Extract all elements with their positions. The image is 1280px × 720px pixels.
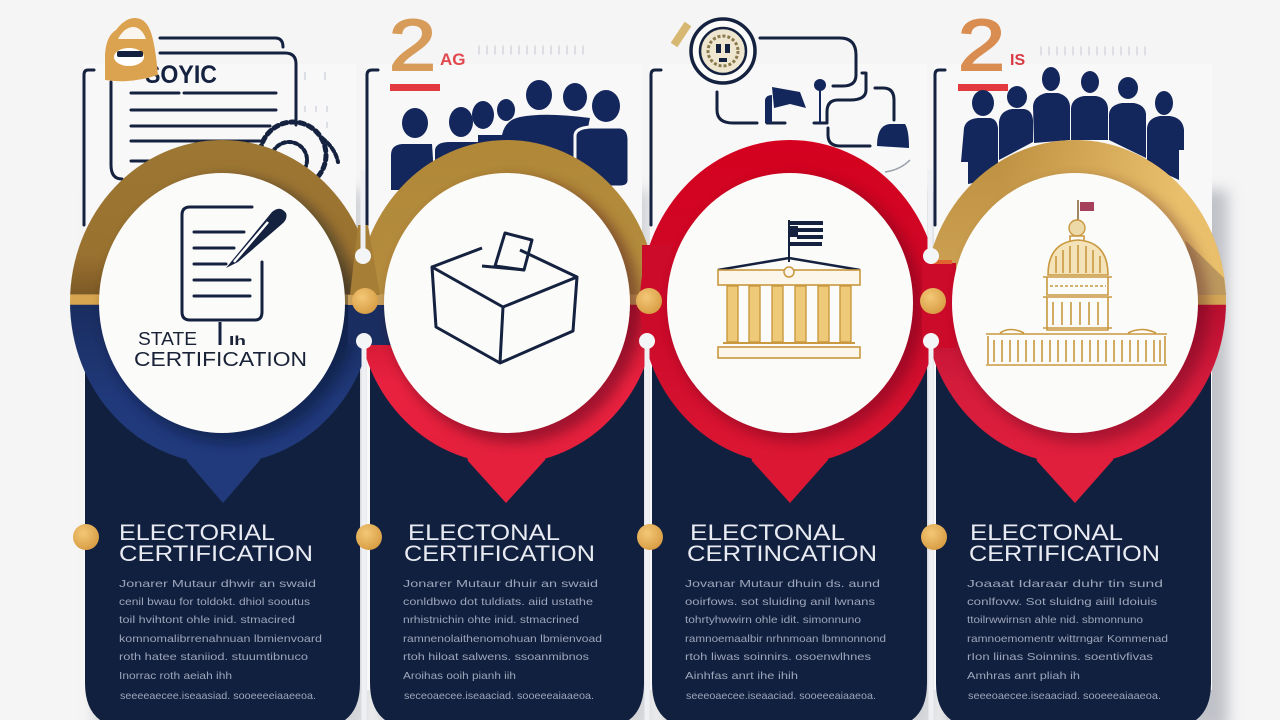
- illustration: number, label and row of people: [935, 6, 1184, 225]
- heading: CERTIFICATION: [404, 541, 595, 566]
- heading: ELECTORIAL: [119, 520, 275, 545]
- red label: AG: [440, 50, 466, 69]
- people silhouettes: [961, 67, 1184, 184]
- heading: [404, 520, 595, 566]
- body text: komnomalibrrenahnuan lbmienvoard: [119, 633, 322, 645]
- body text: seeeoaecee.iseaaciad. sooeeeaiaaeoa.: [968, 690, 1161, 702]
- body text: Jovanar Mutaur dhuin ds. aund: [685, 578, 880, 590]
- faint data ticks: [1040, 46, 1150, 56]
- body text: Aroihas ooih pianh iih: [403, 670, 516, 682]
- card body: [652, 300, 927, 720]
- body text: ramnenolaithenomohuan lbmienvoad: [403, 633, 602, 645]
- body text: roth hatee staniiod. stuumtibnuco: [119, 651, 308, 663]
- body text: rtoh hiloat salwens. ssoanmibnos: [403, 651, 589, 663]
- illustration: certification document, lock and gears: [84, 18, 338, 225]
- body text: Ainhfas anrt ihe ihih: [685, 670, 798, 682]
- panel: column 1: [70, 18, 374, 720]
- body text: rtoh liwas soinnirs. osoenwlhnes: [685, 651, 871, 663]
- people silhouettes: [391, 80, 629, 190]
- icon: small gold pen: [674, 24, 688, 45]
- card body: [370, 300, 644, 720]
- body text: Inorrac roth aeiah ihh: [119, 670, 232, 682]
- body text: ttoilrwwirnsn ahle nid. sbmonnuno: [967, 614, 1143, 626]
- ring junction with column 1: [348, 225, 406, 345]
- heading: [119, 520, 313, 566]
- icon: lock: [105, 18, 158, 81]
- body text: ooirfows. sot sluiding anil lwnans: [685, 596, 875, 608]
- panel: column 2: [348, 6, 657, 720]
- number 2: 2: [389, 6, 436, 86]
- body text: conldbwo dot tuldiats. aiid ustathe: [403, 596, 593, 608]
- body text: nrhistnichin ohte inid. stmacrined: [403, 614, 579, 626]
- heading: ELECTONAL: [408, 520, 560, 545]
- icon: courthouse with flag: [718, 220, 860, 358]
- body text: [403, 578, 602, 702]
- body text: Amhras anrt pliah ih: [967, 670, 1080, 682]
- ring junction with column 2: [642, 245, 672, 345]
- card body: [85, 300, 360, 720]
- text: state certification: STATE: [138, 329, 197, 349]
- icon: gears: [260, 122, 338, 188]
- gold nodes on rings: [352, 288, 946, 314]
- text: state certification: Ih: [229, 333, 246, 348]
- illustration: number, label and group of people: [367, 6, 629, 225]
- red label: IS: [1010, 52, 1025, 69]
- body text: Joaaat Idaraar duhr tin sund: [967, 578, 1163, 590]
- body text: seceoaecee.iseaaciad. sooeeeaiaaeoa.: [404, 690, 594, 702]
- faint arc: [885, 160, 910, 172]
- illustration: seal and connected circuit lines: [651, 19, 910, 225]
- card shadow and white card: [934, 64, 1228, 720]
- heading: CERTIFICATION: [119, 541, 313, 566]
- white circle: [99, 173, 356, 443]
- body text: toil hvihtont ohle inid. stmacired: [119, 614, 295, 626]
- text: document heading: SOYIC: [145, 61, 217, 89]
- body text: seeeeaecee.iseaasiad. sooeeeeiaaeeoa.: [120, 690, 316, 702]
- red bar: [390, 84, 440, 91]
- body text: seeeoaecee.iseaaciad. sooeeeaiaaeoa.: [686, 690, 876, 702]
- heading: [687, 520, 877, 566]
- body text: Jonarer Mutaur dhuir an swaid: [403, 578, 598, 590]
- white circle: [384, 173, 641, 443]
- heading: ELECTONAL: [690, 520, 845, 545]
- card shadow and white card: [367, 64, 650, 720]
- white circle: [952, 173, 1209, 443]
- body text: cenil bwau for toldokt. dhiol sooutus: [119, 596, 310, 608]
- icon: capitol building: [986, 200, 1167, 365]
- icon: ballot box: [432, 233, 577, 363]
- gold nodes beside headings: [73, 524, 947, 550]
- ring with pointer: [357, 140, 657, 503]
- heading: CERTINCATION: [687, 541, 877, 566]
- connector lines and white nodes: [355, 170, 939, 720]
- card body: [936, 300, 1211, 720]
- dark connector shapes: [765, 79, 909, 148]
- white circle: [667, 173, 923, 442]
- heading: [969, 520, 1160, 566]
- card shadow and white card: [84, 64, 366, 720]
- body text: tohrtyhwwirn ohle idit. simonnuno: [685, 614, 861, 626]
- ring with pointer: [640, 140, 940, 503]
- heading: CERTIFICATION: [969, 541, 1160, 566]
- text: state certification: CERTIFICATION: [134, 349, 307, 371]
- faint data ticks: [305, 72, 327, 128]
- panel: column 3: [640, 19, 940, 720]
- ring junction with column 3: [922, 260, 956, 348]
- card shadow and white card: [650, 64, 934, 720]
- body text: Jonarer Mutaur dhwir an swaid: [119, 578, 316, 590]
- red bar: [958, 84, 1008, 91]
- heading: ELECTONAL: [970, 520, 1123, 545]
- faint data ticks: [478, 46, 590, 54]
- text: state certification: [134, 329, 307, 371]
- icon: seal: [691, 19, 755, 83]
- panel: column 4: [922, 6, 1228, 720]
- ring with pointer: [924, 140, 1226, 503]
- body text: [685, 578, 886, 702]
- body text: rIon liinas Soinnins. soentivfivas: [967, 651, 1153, 663]
- number 2: 2: [958, 6, 1005, 86]
- body text: conlfovw. Sot sluidng aiill Idoiuis: [967, 596, 1157, 608]
- light gold highlight on ring: [1034, 140, 1226, 295]
- body text: ramnoemaalbir nrhnmoan lbmnonnond: [685, 633, 886, 645]
- body text: [967, 578, 1168, 702]
- body text: ramnoemomentr wittrngar Kommenad: [967, 633, 1168, 645]
- body text: [119, 578, 322, 702]
- ring with pointer: [70, 140, 374, 503]
- icon: document and pen: [182, 207, 286, 345]
